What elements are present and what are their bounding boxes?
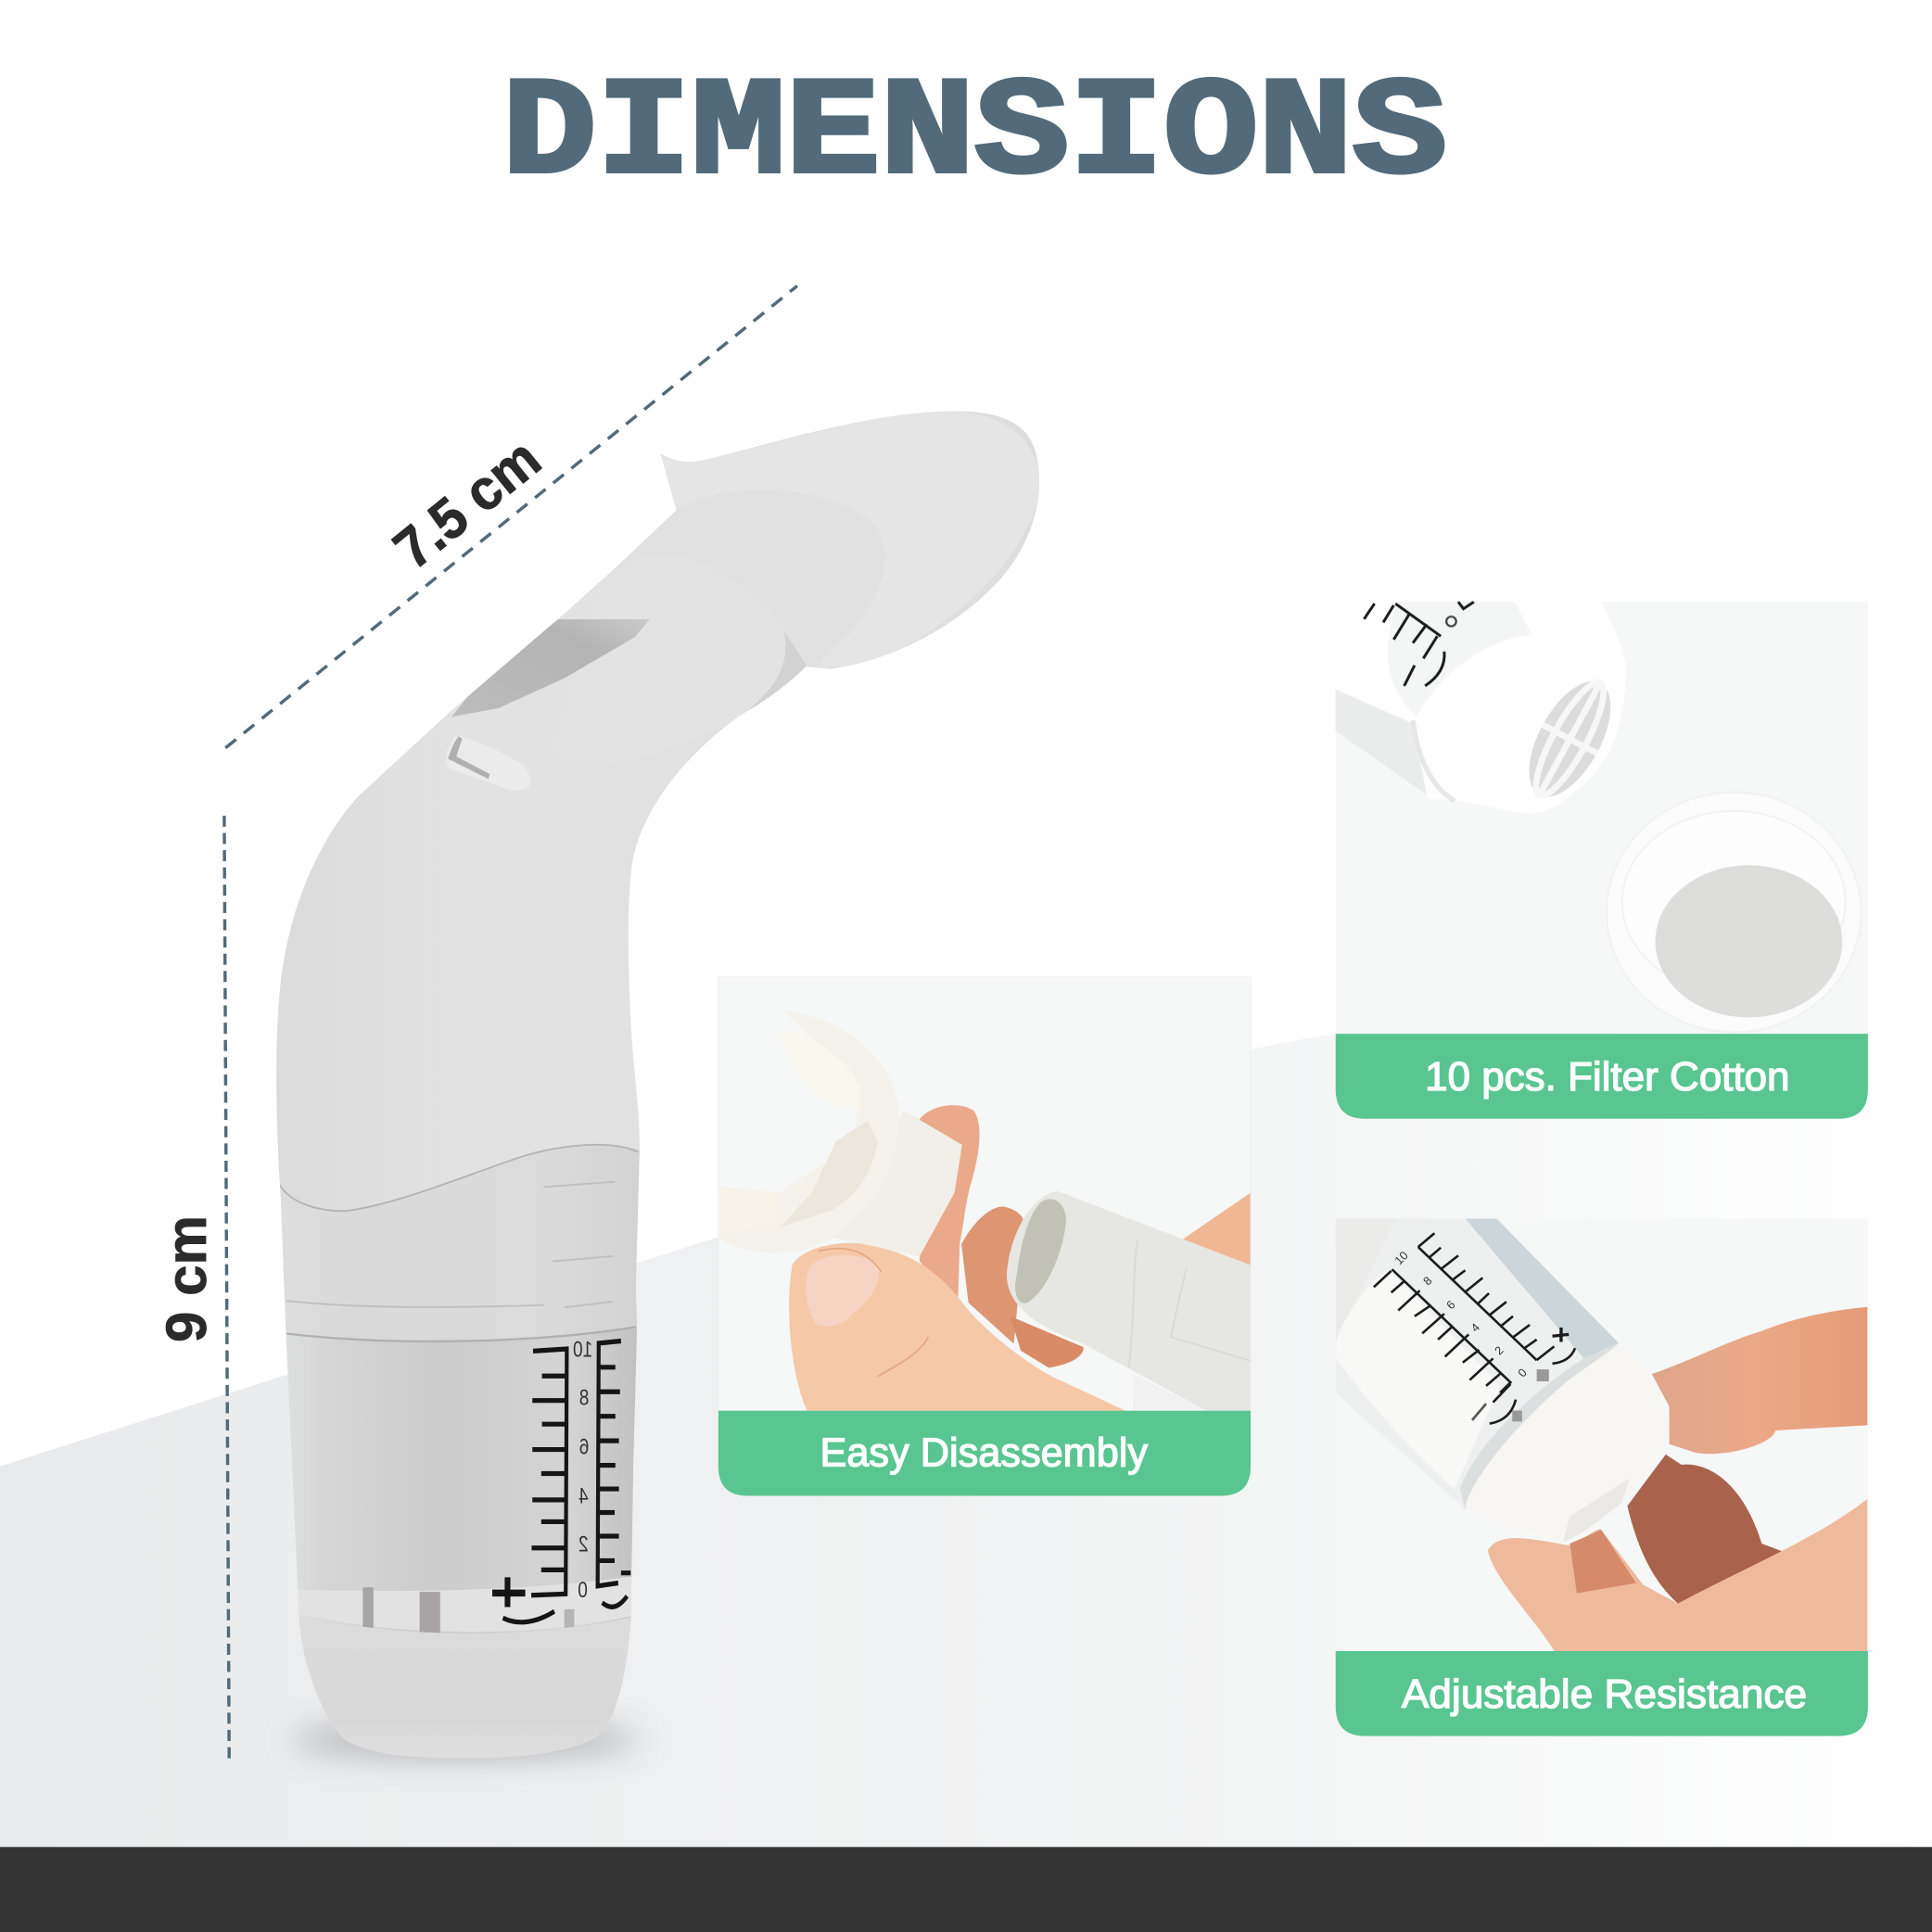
ruler numbers mirrored: 2 [578,1532,589,1557]
ruler numbers mirrored [573,1341,591,1597]
ruler numbers mirrored: 8 [579,1386,589,1410]
band below wave [553,1146,640,1335]
caption bar [1336,1034,1868,1119]
mouthpiece outer [1018,437,1039,543]
background wedge [0,1033,1932,1932]
ruler numbers mirrored: 10 [573,1338,592,1362]
photo background [1336,602,1868,1034]
slot [446,734,530,791]
caption bar [1336,1651,1868,1736]
collar [553,555,785,763]
footer bar [0,1847,1932,1932]
ruler [492,1341,630,1622]
collar shadow [747,631,809,711]
device upper body [276,412,1039,1370]
photo background [1336,1218,1868,1651]
photo background [718,977,1251,1411]
panel: filter cotton [1335,601,1868,1119]
band marks [286,1182,615,1307]
mouthpiece details [446,411,1040,791]
photo: hand disassembling device [718,1011,1251,1412]
photo: fingers adjusting dial: 2 [1493,1344,1506,1357]
ruler numbers mirrored: 4 [578,1484,589,1508]
ruler numbers mirrored: 6 [579,1434,589,1459]
caption bar [718,1411,1251,1496]
base cap [353,1617,630,1734]
label: 9 cm: 9 cm [155,1215,218,1342]
photo: fingers adjusting dial: 10 [1392,1249,1411,1267]
ring stripes [362,1587,574,1634]
photo: fingers adjusting dial: 0 [1516,1366,1530,1379]
tank rim line [286,1327,636,1341]
photo: fingers adjusting dial: 8 [1420,1274,1434,1288]
mouthpiece neck [600,490,885,711]
panel: adjustable resistance [1335,1218,1868,1736]
clear ring [296,1576,632,1632]
dashed line: width dimension [225,286,797,748]
tank [332,1328,637,1637]
caption text: Easy Disassembly [820,1430,1148,1476]
ruler numbers mirrored: 0 [578,1578,588,1603]
dashed line: height dimension [224,816,229,1760]
device shadow [291,1722,641,1757]
photo: fingers adjusting dial [1335,1218,1867,1653]
photo: fingers adjusting dial: 4 [1468,1321,1482,1335]
title: DIMENSIONS [502,57,1447,213]
device lower: transparent chamber [271,1145,646,1769]
caption text: 10 pcs. Filter Cotton [1425,1054,1789,1099]
wave line [279,1145,638,1211]
photo: fingers adjusting dial: 6 [1444,1298,1458,1312]
label: 7.5 cm: 7.5 cm [382,426,552,581]
panel: easy disassembly [718,977,1251,1496]
caption text: Adjustable Resistance [1402,1671,1807,1717]
photo: filter and cap [1335,601,1862,1032]
product: lung trainer device [276,412,1040,1758]
window [451,619,650,717]
